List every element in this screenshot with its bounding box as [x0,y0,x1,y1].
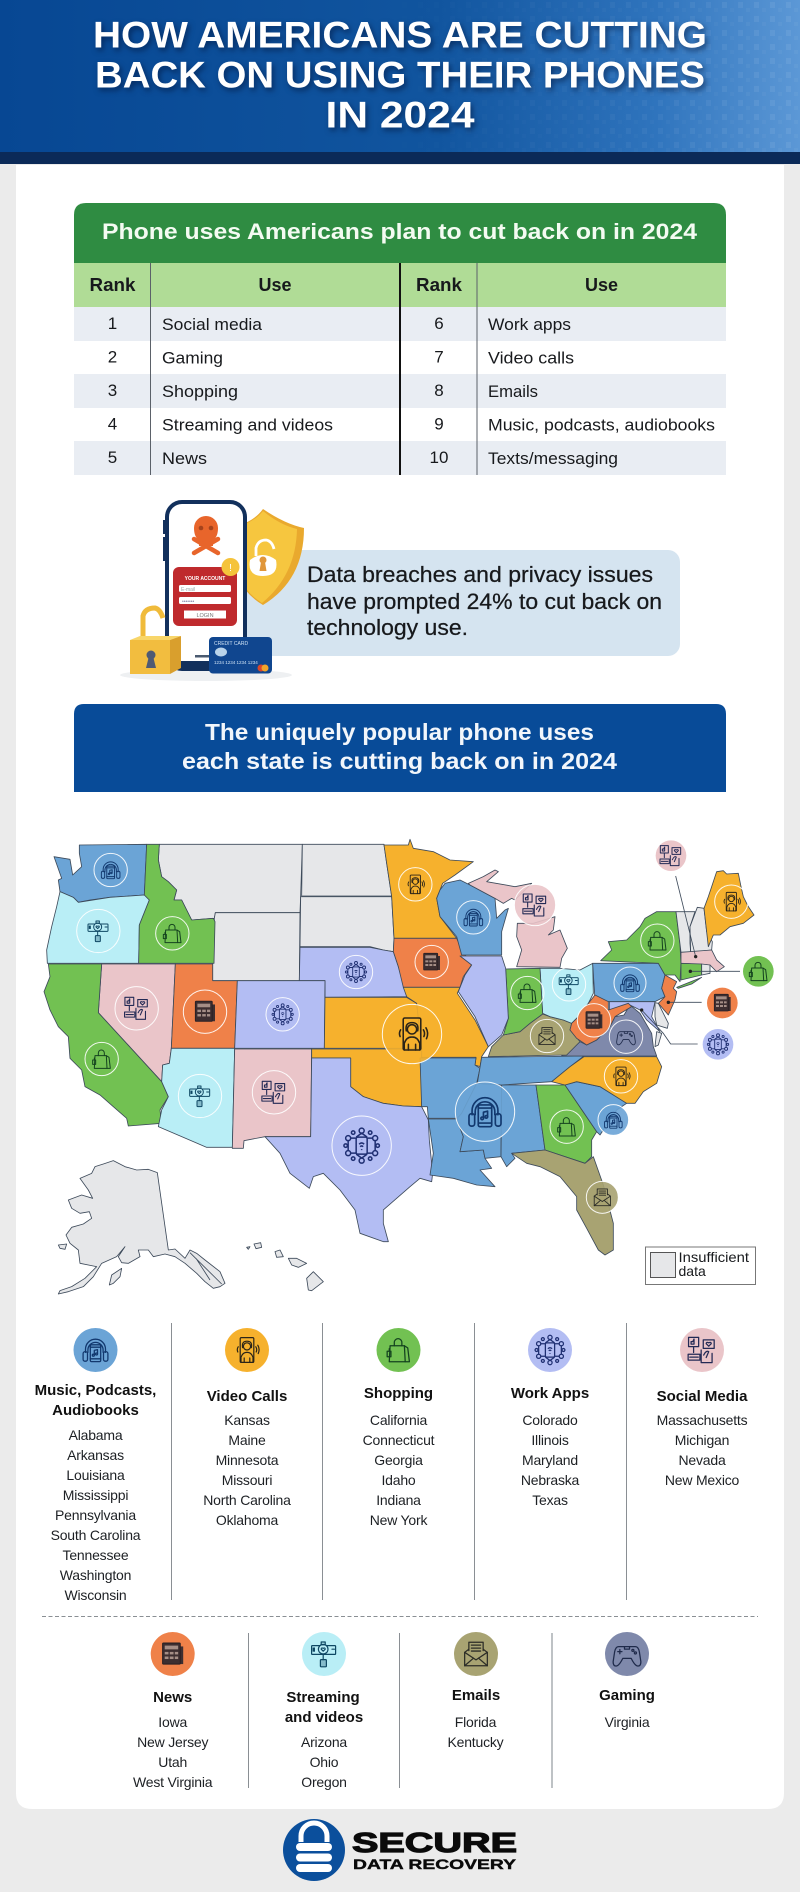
marker: Minnesota [399,868,432,901]
legend column: work apps [511,1328,589,1508]
legend column: social media: Social Media [657,1388,748,1405]
marker: New Mexico [252,1071,296,1114]
table rows: Shopping [162,382,238,401]
section banner: each state is cutting back on in 2024 [182,748,617,774]
legend column: shopping: Indiana [376,1492,421,1508]
legend column: video calls: Video Calls [207,1388,287,1405]
marker: Florida [586,1181,618,1213]
table rows: 8 [434,381,444,400]
marker: Washington [94,853,127,887]
callout: data breaches: technology use. [307,615,468,640]
legend column: social media: Nevada [678,1452,726,1468]
legend column: video calls: Kansas [224,1412,270,1428]
legend column: music: Louisiana [66,1467,125,1483]
choropleth map of US states [44,839,774,1294]
table column headers [74,263,726,307]
marker: Indiana [511,976,544,1010]
table rows: 4 [108,415,117,434]
table title bar [74,203,726,263]
login form: LOGIN [196,613,214,619]
login form: ••••••• [182,599,195,605]
marker: South Carolina [598,1105,629,1135]
marker: Nevada [115,987,158,1030]
legend column: shopping: California [370,1412,427,1428]
marker: Ohio [552,968,586,1001]
legend column: work apps: Nebraska [521,1472,580,1488]
table rows: News [162,449,207,468]
legend column: gaming: Virginia [605,1714,650,1730]
legend column: social media: New Mexico [665,1472,740,1488]
table rows: 7 [434,348,444,367]
marker: West Virginia [577,1004,611,1037]
legend column: work apps: Work Apps [511,1385,589,1402]
marker: Idaho [156,917,189,950]
legend column: video calls: Oklahoma [216,1512,279,1528]
title: HOW AMERICANS ARE CUTTING [93,14,707,56]
legend column: music: Washington [60,1567,131,1583]
legend column: emails: Kentucky [448,1734,504,1750]
map legend: insufficient data: data [678,1263,706,1279]
icon: credit card: 1234 1234 1234 1234 [214,660,258,665]
title [93,14,707,136]
legend column: music: Audiobooks [52,1402,139,1419]
marker: Missouri [382,1004,442,1064]
legend column: social media: Michigan [675,1432,729,1448]
legend column: video calls: Maine [228,1432,266,1448]
legend column: news: News [153,1689,192,1706]
logo: Secure Data Recovery: DATA RECOVERY [353,1856,517,1872]
marker: Arizona [178,1074,222,1118]
legend column: shopping: Shopping [364,1385,433,1402]
marker: Iowa [415,945,448,979]
callout: data breaches: have prompted 24% to cut back on [307,589,662,614]
marker: New Jersey [707,988,738,1018]
legend column: streaming [285,1632,363,1790]
legend column: shopping [363,1328,435,1528]
legend column: music: Wisconsin [64,1587,126,1603]
callout: data breaches [240,550,680,656]
legend column: news: Utah [158,1754,187,1770]
table rows: Streaming and videos [162,416,333,434]
legend column: emails [448,1632,504,1750]
legend column: streaming: Streaming [286,1689,360,1706]
title: BACK ON USING THEIR PHONES [95,54,705,96]
table rows: 2 [108,348,117,367]
icon: credit card: CREDIT CARD [214,641,248,647]
section banner: The uniquely popular phone uses [205,719,594,745]
legend column: gaming: Gaming [599,1687,655,1704]
login form: E-mail [181,587,195,593]
icon: credit card [209,637,272,674]
legend column: news [133,1632,213,1790]
table rows: 1 [108,314,117,333]
marker: Colorado [266,998,299,1031]
marker: North Carolina [604,1060,638,1093]
marker: Utah [183,990,227,1033]
marker: Wisconsin [457,901,490,934]
marker: Massachusetts [656,840,686,871]
marker: Texas [332,1116,391,1175]
legend column: news: West Virginia [133,1774,213,1790]
legend column: music: Alabama [69,1427,123,1443]
legend column: social media: Massachusetts [657,1412,748,1428]
legend column: video calls: Minnesota [216,1452,279,1468]
table rows: Work apps [488,315,571,334]
table rows: 6 [434,314,444,333]
eastern states [384,839,754,1255]
legend column: streaming: Arizona [301,1734,347,1750]
icon: open padlock [130,608,181,674]
table rows: Social media [162,315,263,334]
title: IN 2024 [326,95,475,136]
legend column: work apps: Illinois [531,1432,569,1448]
logo: Secure Data Recovery [283,1819,517,1881]
legend column: video calls [203,1328,291,1528]
legend column: music: Pennsylvania [55,1507,136,1523]
marker: Kentucky [530,1019,564,1053]
table column headers: Rank [90,275,137,295]
legend column: video calls: Missouri [222,1472,272,1488]
table rows: Music, podcasts, audiobooks [488,416,715,434]
table column headers: Use [585,275,618,295]
marker: California [85,1042,118,1076]
header banner [0,0,800,164]
legend column: music: South Carolina [51,1527,141,1543]
legend column: gaming [599,1632,655,1730]
legend column: music: Tennessee [63,1547,129,1563]
marker: Georgia [550,1110,583,1143]
map markers west [77,853,391,1175]
legend column: music: Music, Podcasts, [35,1382,156,1399]
legend column: emails: Emails [452,1687,500,1704]
legend column: work apps: Colorado [522,1412,578,1428]
legend column: streaming: and videos [285,1709,363,1726]
legend column: news: New Jersey [137,1734,208,1750]
table rows: 5 [108,448,117,467]
marker: Pennsylvania [614,967,646,999]
icon: padlock logo [283,1819,345,1881]
map legend: insufficient data: Insufficient [678,1249,749,1265]
map markers east [382,840,774,1213]
logo: Secure Data Recovery: SECURE [352,1827,517,1858]
marker: Virginia [609,1020,643,1053]
Alaska and Hawaii [58,1161,323,1294]
login form: ! [229,563,232,574]
marker: Maryland [703,1029,733,1060]
western states [44,844,433,1242]
map legend: insufficient data [646,1247,756,1284]
table rows: 9 [434,415,444,434]
icon: phone security illustration [120,502,304,681]
legend: second row [133,1632,655,1790]
legend column: shopping: Georgia [374,1452,423,1468]
legend column: music: Mississippi [63,1487,128,1503]
table rows: Video calls [488,348,574,368]
marker: Oregon [77,909,120,953]
legend column: music [35,1328,156,1603]
legend column: news: Iowa [158,1714,187,1730]
connector lines [640,876,740,1044]
legend column: work apps: Maryland [522,1452,578,1468]
table rows: 3 [108,381,117,400]
table column headers: Use [258,275,292,295]
legend column: shopping: New York [370,1512,428,1528]
marker: Nebraska [339,955,373,989]
table rows: Texts/messaging [488,449,618,468]
panel: ranking table [74,203,726,475]
legend column: shopping: Connecticut [363,1432,435,1448]
icon: shield [240,509,304,605]
login form [173,558,240,626]
icon: smartphone [163,502,245,670]
login form: YOUR ACCOUNT [185,576,225,582]
legend column: emails: Florida [455,1714,497,1730]
legend column: streaming: Ohio [310,1754,339,1770]
callout: data breaches: Data breaches and privacy issues [307,562,653,587]
table rows: 10 [430,448,448,467]
table rows: Gaming [162,348,223,368]
marker: Michigan [514,884,556,926]
legend column: social media [657,1328,748,1488]
legend: first row [35,1323,748,1603]
section banner [74,704,726,792]
legend column: streaming: Oregon [301,1774,347,1790]
icon: skull and crossbones [194,516,218,553]
table rows: Emails [488,382,538,401]
marker: Connecticut [743,956,774,987]
table title bar: Phone uses Americans plan to cut back on in 2024 [102,219,698,244]
legend column: work apps: Texas [532,1492,568,1508]
marker: Maine [715,885,748,918]
legend column: shopping: Idaho [381,1472,416,1488]
legend column: video calls: North Carolina [203,1492,291,1508]
marker: Alabama [455,1082,515,1141]
table column headers: Rank [416,275,463,295]
marker: New York [641,924,674,957]
table rows [74,307,726,475]
legend column: music: Arkansas [67,1447,124,1463]
